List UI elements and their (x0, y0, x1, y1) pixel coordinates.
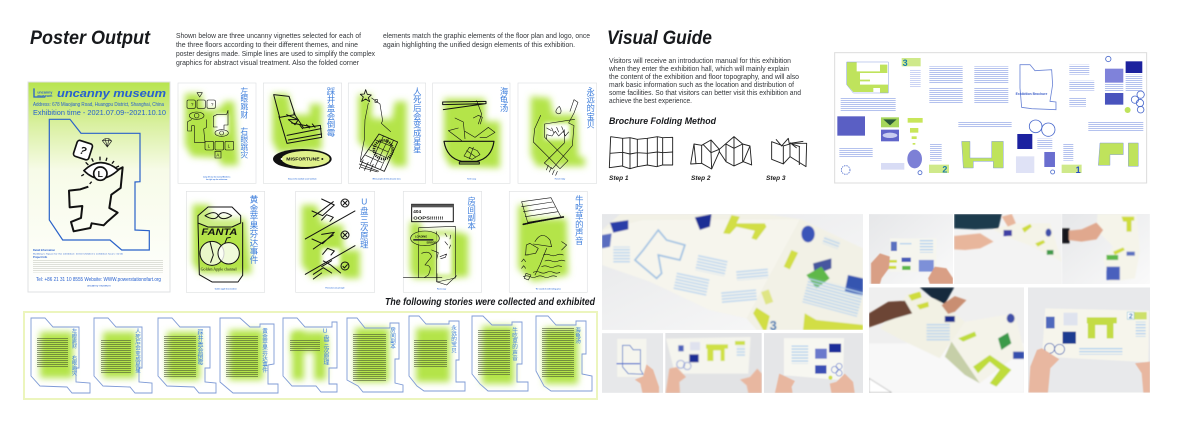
text block: poster intro column 1 (176, 33, 375, 67)
doodle (187, 93, 234, 158)
brochure circles (841, 56, 1144, 175)
heading: collected stories: The following stories were collected and exhibited (385, 296, 595, 308)
hands (871, 253, 953, 284)
label: step 3: Step 3 (766, 175, 786, 182)
poster detail text: Project Info (33, 255, 48, 259)
caption: Forever baby (555, 178, 565, 180)
poster detail text: Building C Space for the exhibition: 10:00 Children's exhibition hours: 10:00 (33, 252, 124, 256)
page circles (831, 363, 842, 376)
photo: spread page with images (764, 333, 863, 393)
exhibition time: Exhibition time - 2021.07.09--2021.10.10 (33, 110, 166, 117)
label: step 2: Step 2 (691, 175, 711, 182)
spread plan lime (1087, 317, 1117, 338)
photo brochure plan (635, 230, 685, 278)
green area (185, 94, 238, 165)
floor plan outline (49, 119, 149, 250)
vertical title: U盘三次原理 (359, 197, 369, 248)
story card 3 (158, 318, 216, 393)
logo: uncanny (37, 91, 53, 95)
photo: folded page held flat (869, 214, 953, 284)
poster: turtle soup (433, 83, 510, 183)
poster contact line: Tel: +86 21 31 10 8555 Website: WWW.powerstationofart.org (36, 277, 161, 283)
photo: brochure lifted by hand (1062, 214, 1150, 284)
vertical title: 永远的宝贝 (586, 86, 596, 130)
icon: step 1 flat sheet (609, 137, 673, 169)
hands (666, 367, 762, 393)
text block: poster intro column 2: elements match the graphic elements of the floor plan and logo, once (383, 33, 590, 40)
bowl doodle (443, 101, 495, 164)
character illustration (69, 139, 123, 231)
text block: visual guide intro: some facilities. So that visitors can better visit this exhibition and (609, 90, 801, 97)
text block: poster intro column 1: Shown below are three uncanny vignettes selected for each of (176, 33, 361, 40)
floor number 3: 3 (903, 58, 908, 68)
heading: Poster Output: Poster Output (30, 28, 151, 49)
spread images (1046, 313, 1146, 355)
text block: poster intro column 1: the three floors according to their different themes, and nine (176, 42, 358, 49)
story card 4 (220, 318, 278, 393)
icon: step 3 book (772, 138, 807, 167)
photo number 3: 3 (770, 319, 777, 333)
story card 7 (409, 316, 465, 391)
vertical title: 左眼跳财 右眼跳灾 (240, 86, 249, 160)
folded page contents (1004, 224, 1054, 255)
photo: brochure tented on table (869, 287, 1024, 393)
poster address: Address: 678 Miaojiang Road, Huangpu District, Shanghai, China (33, 102, 164, 108)
green area (410, 222, 468, 278)
panel: story cards (24, 312, 597, 399)
brochure floor plan bottom right (1098, 143, 1138, 166)
green area (358, 95, 407, 166)
vertical title: 人死后会变成星星 (412, 87, 422, 154)
poster: left eye: L (208, 144, 211, 149)
caption: The sound of cattle eating grass (536, 287, 561, 290)
text block: visual guide intro: when they enter the exhibition hall, which will mainly explain (608, 66, 789, 73)
floor number 2 (929, 165, 949, 175)
logo: museum (37, 94, 53, 98)
poster: forever baby (518, 83, 597, 183)
caption: Golden apple fanta incident (215, 287, 237, 290)
door doodle (403, 226, 457, 285)
caption: Step on the manhole cover bad luck (288, 177, 317, 180)
story card 9 (536, 316, 592, 391)
hands (775, 374, 855, 393)
lifted page contents (1106, 217, 1135, 280)
text block: visual guide intro: mark basic information such as the location and distribution of (609, 82, 794, 89)
poster: left eye: L (228, 144, 231, 149)
page contents (792, 344, 841, 374)
photo: brochure being folded (954, 214, 1062, 284)
heading: brochure folding method: Brochure Folding Method (609, 116, 716, 126)
hand (635, 364, 659, 393)
brochure contents (837, 56, 1144, 175)
story card 6 (347, 318, 403, 392)
table sheet corner (869, 378, 892, 393)
tented page contents (908, 292, 1024, 387)
hand (1069, 223, 1103, 242)
text block: poster intro column 1: poster designs made. Simple lines are used to simplify the complex (176, 51, 375, 58)
hands (954, 214, 1016, 250)
floor number 1: 1 (1076, 165, 1081, 175)
poster detail text (33, 248, 163, 272)
poster title: uncanny museum (57, 88, 166, 100)
heading: Visual Guide: Visual Guide (607, 28, 712, 49)
can doodle (198, 207, 243, 282)
story card 9: 海龟汤 (574, 326, 581, 345)
floor number 1 (1062, 165, 1082, 175)
usb doodle (305, 199, 355, 279)
poster: left eye: ? (211, 102, 214, 107)
spread circles (677, 360, 691, 370)
poster: manhole misfortune (263, 83, 342, 183)
green area (518, 205, 568, 282)
can subtitle: Golden Apple channel (201, 267, 237, 271)
text block: visual guide intro (608, 58, 801, 105)
story card 8: 牛吃草的声音 (511, 326, 518, 362)
text block: visual guide intro: Visitors will receive an introduction manual for this exhibition (609, 58, 791, 65)
sleeve (1062, 228, 1070, 243)
photo lime plan (723, 215, 863, 330)
text block: poster intro column 2 (383, 33, 590, 49)
photo: cover held in hand (602, 333, 663, 393)
story card 3: 踩井盖会倒霉 (196, 329, 203, 366)
brochure floor plan top left (847, 62, 888, 93)
icon: step 2 accordion (691, 137, 752, 169)
story card 5 (283, 318, 337, 392)
sleeve (920, 287, 954, 304)
green area (272, 94, 322, 153)
vertical title: 牛吃草的声音 (574, 194, 584, 246)
character illustration: ? (78, 144, 88, 158)
error window (412, 204, 453, 222)
photo brochure images (602, 214, 863, 295)
can label: FANTA (201, 227, 237, 237)
photo: large brochure view (602, 214, 863, 333)
poster: golden apple fanta (186, 191, 265, 292)
floor number 2 block: 2 (1129, 312, 1133, 321)
text block: poster intro column 1: graphics for abstract visual treatment. Also the folded corner (176, 60, 360, 67)
photo: second floor spread held open (1028, 288, 1150, 393)
caption: Room copy (437, 288, 446, 290)
character illustration: L (98, 169, 104, 179)
vertical title: 房间副本 (467, 196, 477, 231)
story card 7: 永远的宝贝 (450, 324, 457, 354)
caption: When people die they become stars (373, 177, 401, 180)
story card 1 (31, 318, 90, 393)
poster: left eye: ? (191, 102, 194, 107)
page contents (888, 239, 934, 272)
text block: poster intro column 2: again highlighting the unified design elements of this exhibition. (383, 42, 575, 49)
light hand (942, 296, 966, 314)
panel: main poster (28, 82, 170, 292)
cover plan (623, 345, 643, 374)
story card 2 (94, 318, 152, 393)
story card 5: U盘三次原理 (322, 329, 329, 365)
error window: OOPS!!!!!!! (413, 215, 444, 220)
star and net doodle (360, 90, 398, 171)
story card 8 (472, 316, 528, 391)
spread contents (678, 341, 745, 362)
story card 6: 房间副本 (389, 326, 396, 351)
vertical title: 海龟汤 (499, 86, 509, 113)
poster detail text: Detail Information (33, 248, 55, 252)
folding diagrams (609, 137, 807, 169)
brochure lime drips (908, 118, 923, 145)
caption: Turtle soup (467, 177, 476, 180)
green area (302, 205, 360, 278)
poster footer logo: uncanny museum (87, 284, 111, 288)
caption: Three-time usb principle (325, 287, 345, 290)
boot doodle (274, 95, 322, 143)
dark hand (869, 301, 912, 327)
brochure cover plan (1020, 65, 1056, 110)
poster: room copy: ERROR (427, 241, 436, 245)
error window: 404 (413, 209, 421, 214)
logo (34, 88, 53, 98)
story card 1: 左眼跳财 右眼跳灾 (71, 327, 77, 377)
cow and grass doodle (522, 198, 567, 280)
loading bubble text: LOADING (415, 235, 427, 239)
text block: visual guide intro: achieve the best experience. (609, 98, 692, 105)
green area (531, 96, 585, 166)
brochure floor plan bottom centre (962, 141, 1003, 168)
poster: left eye (178, 83, 256, 183)
poster: three usb principle (296, 191, 375, 292)
caption: Jump left eye for money Blindness (203, 176, 230, 179)
text block: visual guide intro: the content of the exhibition and floor topography, and will also (609, 74, 799, 81)
vertical title: 黄金苹果芬达事件 (249, 194, 259, 265)
story card 4: 黄金苹果芬达事件 (261, 327, 268, 374)
spread circles (1045, 343, 1065, 354)
label: step 1: Step 1 (609, 175, 629, 182)
hands (1029, 348, 1150, 393)
brochure images (837, 61, 1142, 168)
green area (193, 204, 252, 273)
floor number 3 (902, 58, 921, 68)
poster: room copy (403, 191, 482, 292)
poster: stars after death (348, 83, 426, 183)
panel: brochure spread (835, 53, 1147, 183)
floor number 2: 2 (942, 165, 947, 175)
green area (444, 99, 500, 168)
photo blue text blocks (613, 236, 864, 317)
poster: cow eating grass (509, 191, 587, 292)
misfortune oval: MISFORTUNE (286, 156, 320, 161)
brochure lime dot (1125, 107, 1131, 113)
brochure cover title: Exhibition Brochure (1016, 91, 1048, 96)
poster: left eye: for right eye for misfortune (206, 178, 227, 181)
hands doodle (533, 100, 578, 175)
photo: inner spread held open (665, 333, 762, 393)
vertical title: 踩井盖会倒霉 (326, 86, 336, 138)
poster: left eye: A (216, 153, 219, 158)
story card 2: 人死后会变成星星 (134, 328, 141, 373)
brochure text blocks (839, 65, 1143, 173)
